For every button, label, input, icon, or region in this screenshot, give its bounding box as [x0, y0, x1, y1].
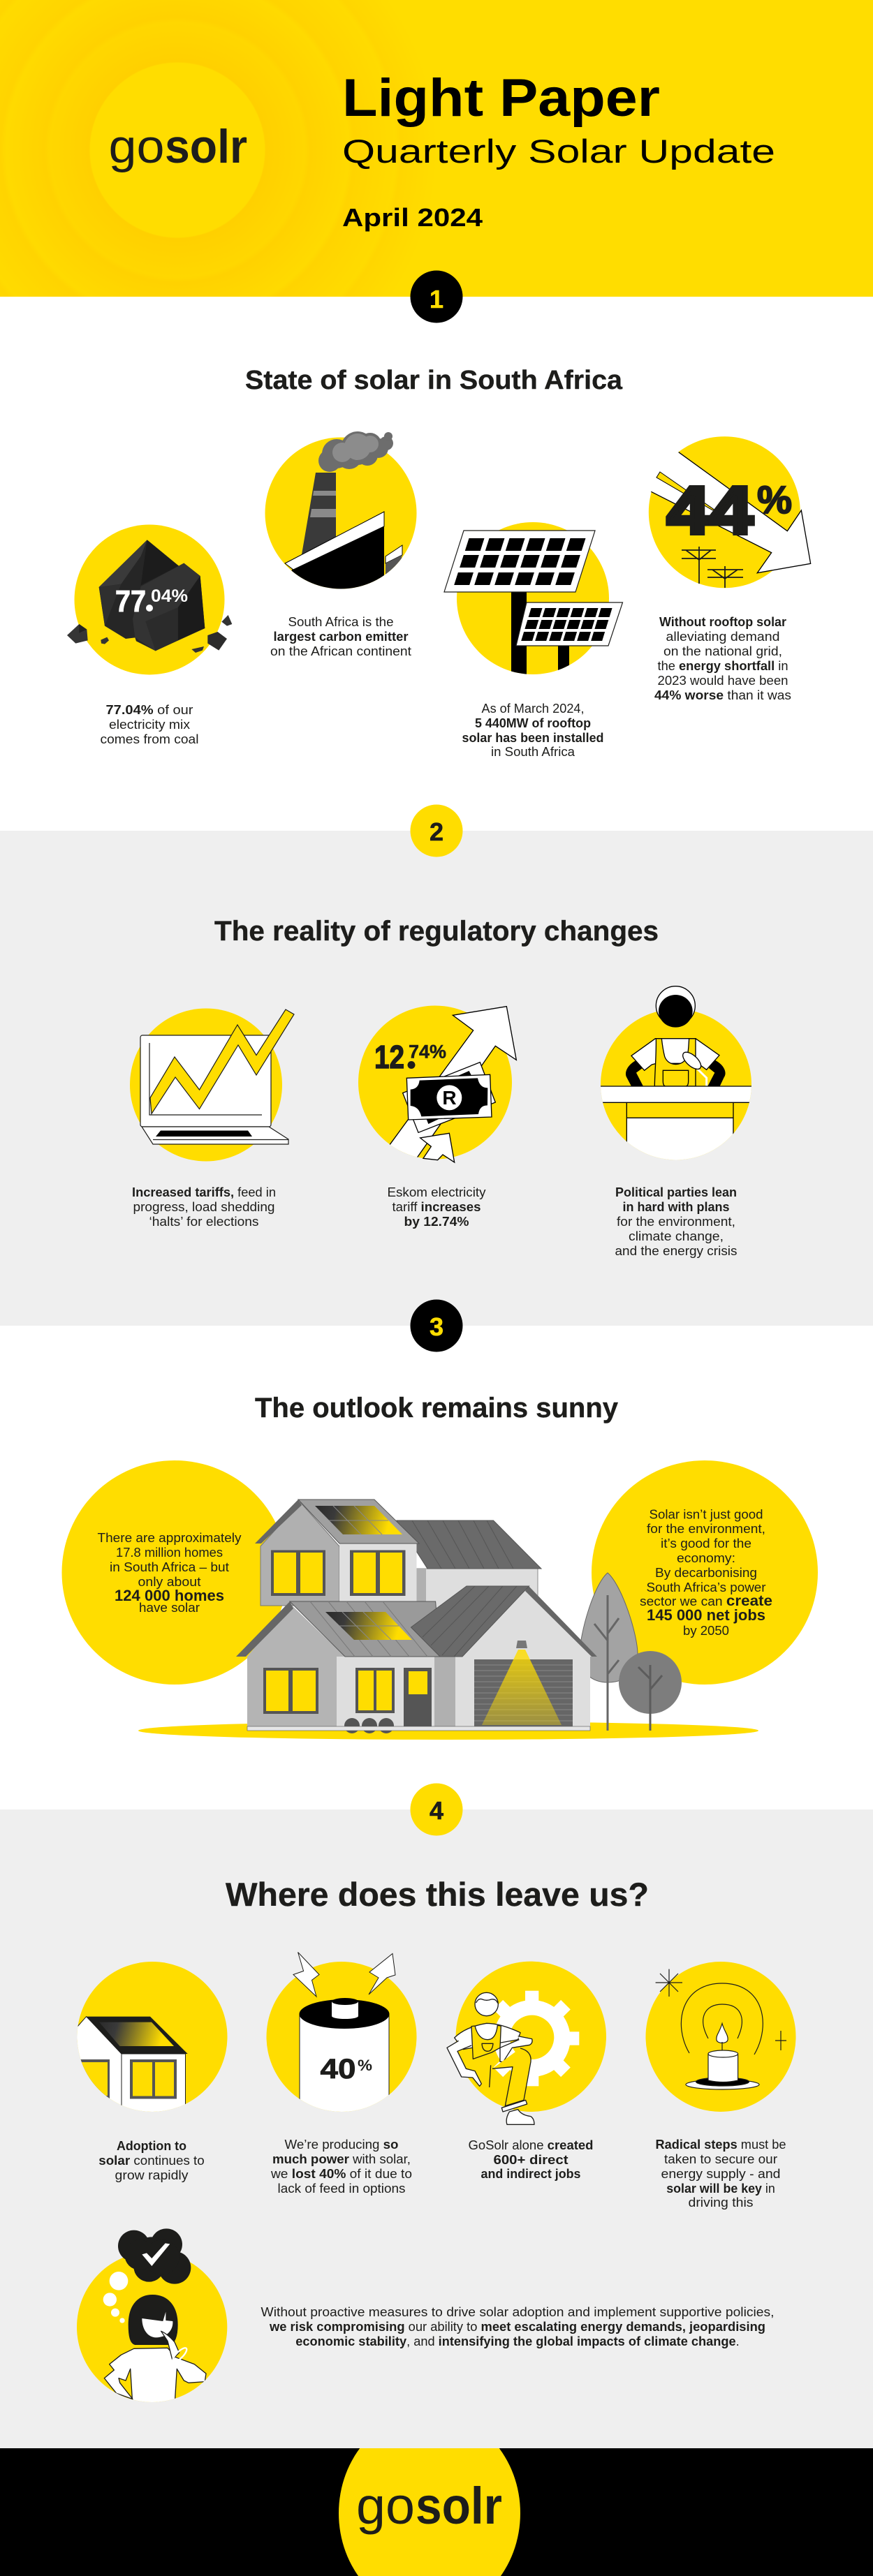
- caption: lost power: lack of feed in options: [278, 2182, 405, 2196]
- caption: rooftop solar: [462, 702, 603, 759]
- caption: 44% worse: 44% worse than it was: [654, 688, 791, 702]
- caption: coal: electricity mix: [109, 718, 190, 732]
- section badge 1: 1: [430, 285, 443, 313]
- caption: 44% worse: alleviating demand: [666, 630, 779, 644]
- callout: jobs: 145 000 net jobs: [647, 1606, 765, 1624]
- panel: political parties: [601, 986, 751, 1258]
- stat: 12.74%: 12: [374, 1039, 404, 1075]
- caption: 44% worse: on the national grid,: [663, 644, 782, 658]
- caption: political parties: in hard with plans: [623, 1200, 729, 1214]
- ground: [138, 1722, 758, 1740]
- callout: jobs: for the environment,: [647, 1522, 765, 1536]
- callout: jobs: Solar isn’t just good: [650, 1508, 763, 1522]
- callout: jobs: by 2050: [683, 1624, 729, 1638]
- section badge 4: 4: [430, 1796, 443, 1825]
- heading: where does this leave us: Where does this leave us?: [226, 1876, 649, 1913]
- caption: adoption: Adoption to: [117, 2139, 186, 2153]
- small tree: [619, 1651, 682, 1731]
- caption: carbon emitter: on the African continent: [270, 644, 411, 658]
- caption: coal: 77.04% of our: [106, 703, 193, 717]
- caption: radical steps: taken to secure our: [664, 2152, 777, 2166]
- panel: radical steps: [645, 1962, 796, 2209]
- date: April 2024: [342, 203, 483, 232]
- caption: tariffs: ‘halts’ for elections: [149, 1215, 258, 1229]
- icon: laptop with rising chart: [140, 1009, 294, 1144]
- section badge 3: 3: [430, 1312, 443, 1341]
- callout: jobs: [592, 1460, 818, 1685]
- caption: political parties: and the energy crisis: [615, 1244, 738, 1258]
- stat: 40%: 40: [320, 2054, 356, 2085]
- footer: [0, 2448, 873, 2576]
- heading: regulatory changes: The reality of regulatory changes: [214, 916, 659, 947]
- icon: factory with smoke: [284, 431, 402, 589]
- caption: adoption: solar continues to: [98, 2154, 205, 2168]
- logo: gosolr footer: solr: [416, 2477, 502, 2535]
- text block: conclusion: Without proactive measures to drive solar adoption and implement supportive policies,: [261, 2305, 774, 2319]
- caption: jobs: and indirect jobs: [480, 2167, 581, 2181]
- callout: homes with solar: [61, 1460, 288, 1685]
- icon: politician at podium: [601, 986, 751, 1160]
- callout: homes with solar: only about: [138, 1575, 201, 1589]
- subtitle: Quarterly Solar Update: [342, 133, 775, 170]
- panel: lost power: [267, 1952, 416, 2196]
- caption: Eskom: tariff increases: [393, 1200, 480, 1214]
- caption: carbon emitter: [270, 615, 411, 658]
- callout: homes with solar: in South Africa – but: [110, 1560, 229, 1574]
- stat: 44%: 44: [667, 473, 753, 548]
- title: Light Paper: [342, 68, 660, 128]
- caption: carbon emitter: South Africa is the: [288, 615, 394, 629]
- icon: lightning right: [369, 1953, 395, 1994]
- sun ring background: [0, 0, 359, 297]
- panel: coal stat: 04%: [151, 586, 188, 606]
- icon: utility poles: [682, 547, 743, 588]
- panel: tariffs laptop: [130, 1008, 294, 1229]
- text block: conclusion: we risk compromising our ability to meet escalating energy demands, jeopardising: [269, 2320, 765, 2334]
- caption: political parties: [615, 1185, 738, 1258]
- icon: woman: [104, 2295, 206, 2406]
- caption: radical steps: solar will be key in: [666, 2182, 775, 2196]
- text block: conclusion: economic stability, and intensifying the global impacts of climate change .: [295, 2334, 740, 2348]
- panel: rooftop solar installed: [444, 522, 623, 759]
- callout: homes with solar: have solar: [139, 1601, 200, 1615]
- panel: Eskom increase: 74%: [409, 1042, 446, 1063]
- section badge 2: 2: [430, 817, 443, 846]
- caption: radical steps: Radical steps must be: [655, 2138, 786, 2152]
- caption: 44% worse: Without rooftop solar: [659, 615, 786, 629]
- section badge 1: [411, 271, 462, 323]
- icon: thought cloud with check: [103, 2228, 191, 2323]
- caption: radical steps: driving this: [689, 2196, 753, 2209]
- icon: coal rocks: [67, 540, 232, 653]
- panel: 44% energy shortfall: [645, 436, 811, 702]
- stat: 77.04%: 77: [115, 584, 146, 619]
- text block: conclusion: [261, 2305, 774, 2348]
- callout: homes with solar: 17.8 million homes: [116, 1546, 223, 1560]
- door: [404, 1668, 432, 1731]
- caption: tariffs: Increased tariffs, feed in: [132, 1185, 276, 1199]
- caption: rooftop solar: in South Africa: [491, 745, 575, 759]
- caption: lost power: [270, 2138, 412, 2196]
- label: rand sign: R: [442, 1087, 457, 1109]
- caption: radical steps: energy supply - and: [661, 2167, 781, 2181]
- panel: Eskom increase: [358, 1005, 516, 1229]
- caption: 44% worse: the energy shortfall in: [658, 659, 788, 673]
- section badge 3: [411, 1300, 462, 1352]
- plant pots: [344, 1718, 394, 1733]
- caption: lost power: much power with solar,: [272, 2152, 411, 2166]
- icon: falling arrow: [645, 452, 811, 573]
- caption: jobs: 600+ direct: [493, 2153, 568, 2167]
- panel: 44% energy shortfall: %: [757, 478, 792, 521]
- illustration: house with solar panels: [138, 1500, 758, 1740]
- icon: house with solar roof: [77, 2017, 188, 2117]
- panel: coal stat: [67, 525, 232, 746]
- icon: battery 40%: [299, 1998, 390, 2119]
- icon: worker with gear: [447, 1991, 579, 2124]
- footer sun: [339, 2448, 520, 2576]
- heading: outlook: The outlook remains sunny: [255, 1393, 619, 1423]
- gear: [484, 1991, 579, 2086]
- caption: rooftop solar: 5 440MW of rooftop: [475, 716, 591, 730]
- icon: lightning left: [293, 1952, 319, 1997]
- caption: 44% worse: 2023 would have been: [658, 674, 788, 688]
- panel: thinking woman: [77, 2228, 227, 2406]
- caption: Eskom: [387, 1185, 486, 1229]
- upper storey: [255, 1500, 419, 1606]
- caption: radical steps: [655, 2138, 786, 2209]
- caption: tariffs: progress, load shedding: [133, 1200, 275, 1214]
- callout: homes with solar: There are approximately: [98, 1531, 242, 1545]
- logo: gosolr header: go: [109, 120, 165, 173]
- icon: solar panels: [444, 531, 623, 684]
- caption: Eskom: Eskom electricity: [387, 1185, 486, 1199]
- caption: coal: comes from coal: [101, 732, 198, 746]
- callout: jobs: it’s good for the: [661, 1537, 751, 1550]
- logo: gosolr header: solr: [165, 120, 247, 173]
- worker: [447, 1992, 534, 2124]
- caption: rooftop solar: As of March 2024,: [482, 702, 584, 716]
- tall tree: [580, 1573, 638, 1731]
- heading: state of solar: State of solar in South Africa: [245, 366, 623, 395]
- caption: jobs: GoSolr alone created: [468, 2138, 594, 2152]
- caption: lost power: we lost 40% of it due to: [270, 2167, 412, 2181]
- caption: jobs: [468, 2138, 594, 2181]
- panel: lost power: %: [358, 2057, 372, 2074]
- logo: gosolr footer: go: [356, 2477, 415, 2535]
- caption: political parties: climate change,: [629, 1229, 724, 1243]
- panel: adoption: [77, 1962, 228, 2182]
- caption: political parties: for the environment,: [617, 1215, 735, 1229]
- caption: coal: [101, 703, 198, 746]
- rear wing: [397, 1520, 541, 1652]
- panel: carbon emitter: [265, 431, 416, 658]
- icon: candle: [656, 1969, 786, 2089]
- caption: lost power: We’re producing so: [285, 2138, 398, 2152]
- caption: adoption: [98, 2139, 205, 2182]
- lower storey: [236, 1586, 597, 1733]
- caption: adoption: grow rapidly: [115, 2168, 189, 2182]
- callout: jobs: economy:: [677, 1551, 735, 1565]
- callout: homes with solar: 124 000 homes: [115, 1587, 224, 1604]
- caption: rooftop solar: solar has been installed: [462, 731, 603, 745]
- caption: 44% worse: [654, 615, 791, 702]
- caption: political parties: Political parties lean: [615, 1185, 737, 1199]
- panel: hero header: [0, 0, 873, 297]
- panel: jobs created: [447, 1962, 606, 2181]
- callout: jobs: sector we can create: [640, 1593, 772, 1609]
- caption: carbon emitter: largest carbon emitter: [274, 630, 408, 644]
- section badge 4: [411, 1783, 462, 1836]
- garage door: [474, 1641, 573, 1731]
- section badge 2: [411, 804, 462, 857]
- callout: jobs: By decarbonising: [655, 1566, 757, 1580]
- icon: arrows with banknote: [390, 1007, 516, 1168]
- caption: tariffs: [132, 1185, 276, 1229]
- callout: jobs: South Africa’s power: [647, 1581, 765, 1594]
- caption: Eskom: by 12.74%: [404, 1215, 469, 1229]
